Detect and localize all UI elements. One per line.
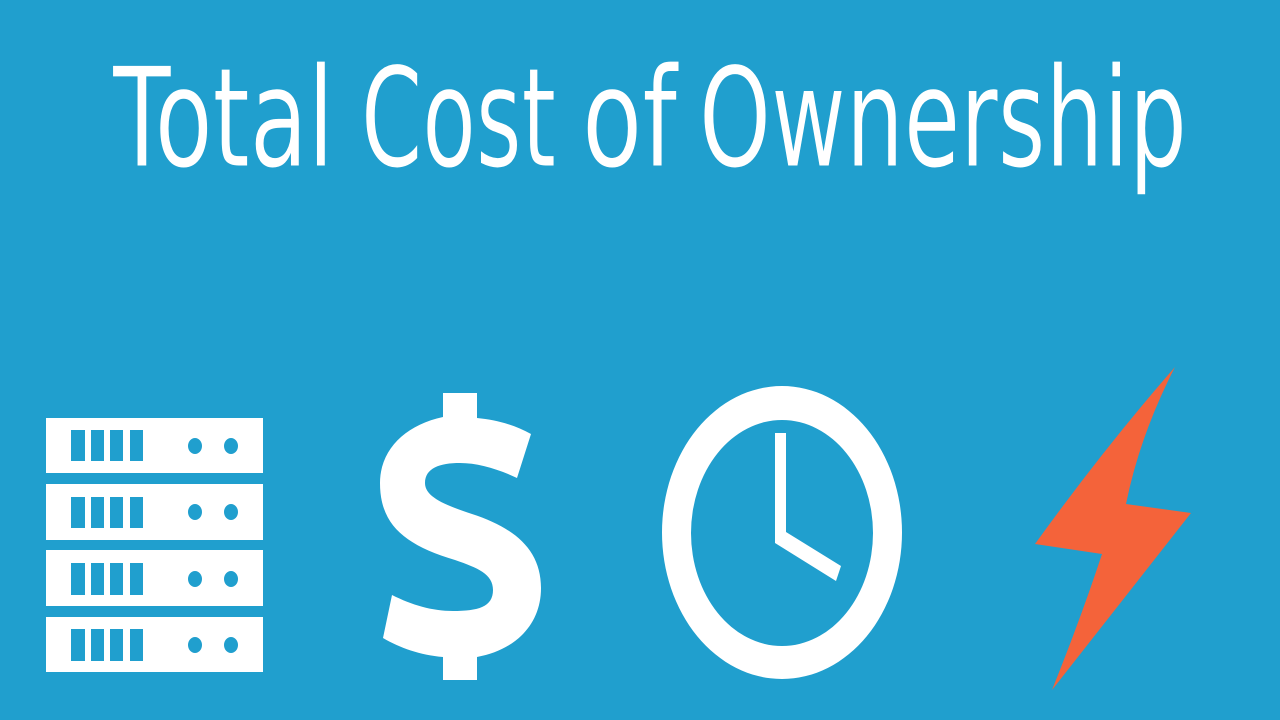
title — [112, 38, 1187, 199]
title: of — [582, 38, 679, 199]
icon: dollar sign — [380, 393, 541, 680]
icon: server rack — [46, 418, 263, 672]
title: Total — [112, 38, 334, 199]
icon: lightning bolt — [1035, 367, 1191, 690]
title: Cost — [361, 38, 556, 199]
icon: clock — [662, 386, 902, 679]
